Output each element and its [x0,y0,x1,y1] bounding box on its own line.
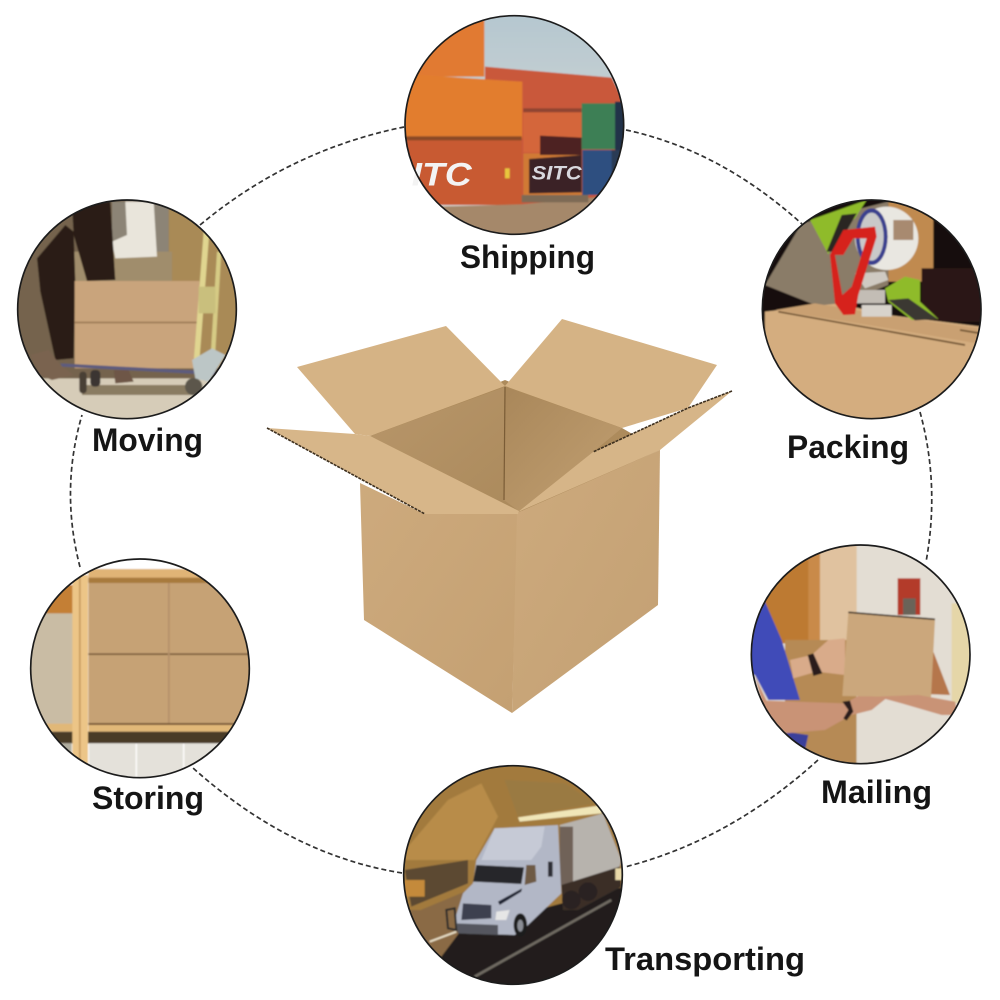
label: Shipping: Shipping [460,239,595,275]
left face [360,483,518,713]
inner right wall [504,387,622,512]
back right flap [505,319,717,428]
photo circle: shipping containers [404,14,624,236]
back left flap [297,326,505,436]
right face [512,450,660,713]
front left flap [267,428,519,514]
inner left wall [370,387,517,510]
central open cardboard box [267,319,732,713]
label: Moving: Moving [92,422,203,458]
container lettering [412,156,583,192]
label: Storing: Storing [92,780,204,816]
box backing [370,380,660,515]
container lettering: ITC [412,156,473,192]
label: Mailing: Mailing [821,774,932,810]
photo circle: moving boxes on hand truck [16,199,238,420]
label: Transporting: Transporting [605,941,805,977]
container lettering: SITC [532,164,583,185]
photo circle: boxes stored on shelf [30,558,250,778]
photo circle: packing with tape gun [762,199,982,420]
dashed connecting ring [70,127,932,873]
label: Packing: Packing [787,429,909,465]
photo circle: hand-over of a mailing box [750,544,971,764]
photo circle: semi truck on highway [402,764,624,986]
front right flap [518,391,732,512]
